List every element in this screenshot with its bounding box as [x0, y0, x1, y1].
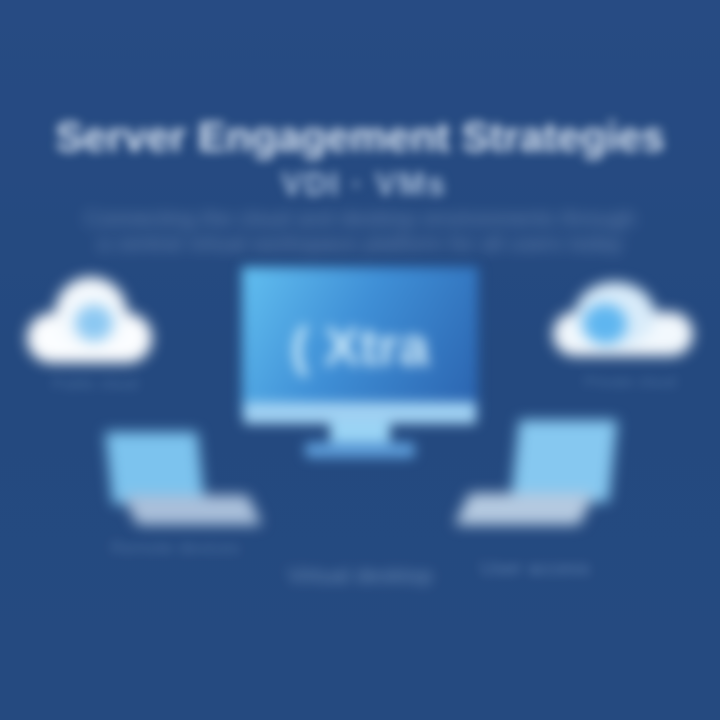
laptop screen [105, 432, 205, 504]
monitor base [305, 442, 415, 458]
label: left laptop: Remote devices [110, 538, 240, 558]
label: right laptop: User access [480, 558, 590, 580]
icon: left laptop [97, 422, 268, 535]
monitor stand [330, 422, 390, 446]
subtitle: a central virtual workspace platform for all users today [97, 231, 623, 256]
icon: right cloud [542, 272, 704, 368]
label: right cloud: Private cloud [584, 374, 676, 391]
monitor screen [242, 267, 478, 417]
label: center: Virtual desktop [287, 563, 433, 588]
subtitle: Connecting the cloud and desktop environments through [84, 206, 636, 231]
title: Server Engagement Strategies [55, 113, 665, 160]
laptop keyboard [455, 493, 594, 525]
icon: central monitor [234, 258, 486, 466]
icon: right laptop [448, 410, 626, 535]
subtitle [84, 206, 636, 256]
laptop keyboard [123, 495, 262, 525]
icon: left cloud [16, 266, 162, 374]
laptop screen [511, 420, 617, 502]
monitor bezel [244, 402, 476, 424]
screen label: ( Xtra [291, 317, 429, 377]
label: left cloud: Public cloud [52, 376, 138, 393]
title second line: VDI · VMs [281, 166, 447, 202]
